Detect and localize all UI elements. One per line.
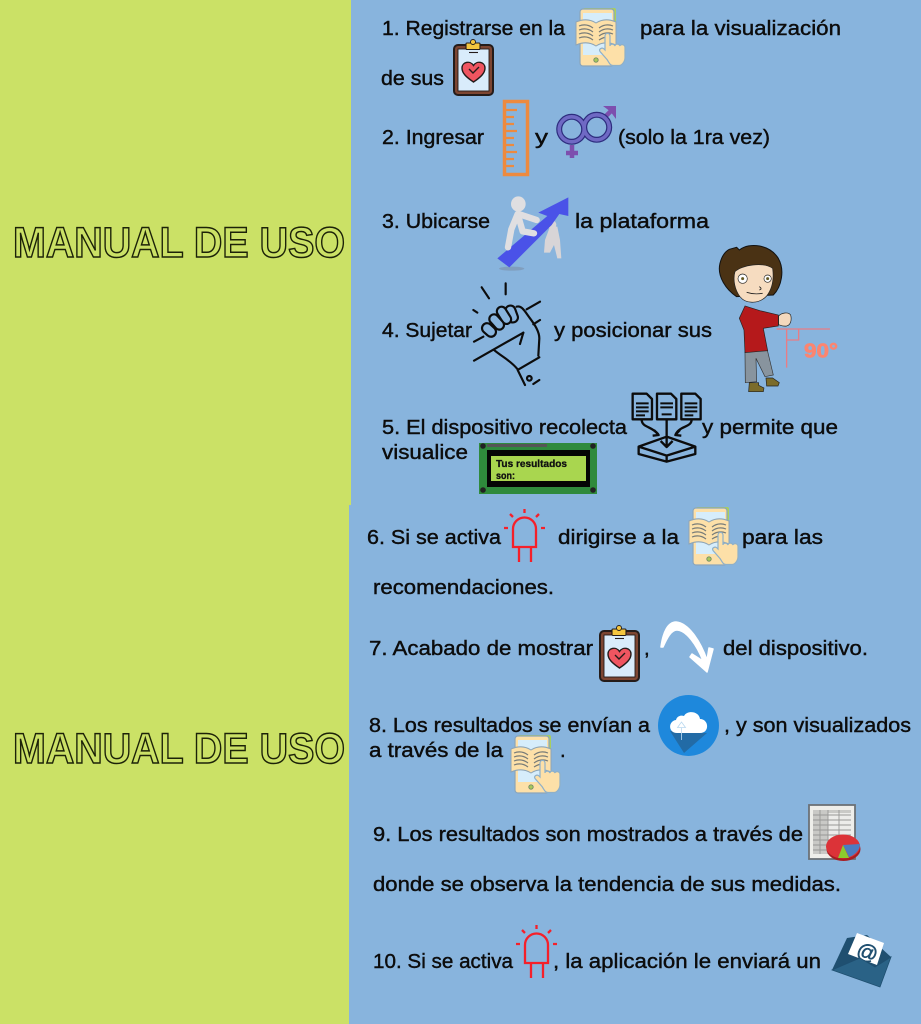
text: lcd message: son: xyxy=(496,470,515,482)
text: step 9 start: 9. Los resultados son mostrados a través de xyxy=(373,823,803,846)
text: step 6 end: recomendaciones. xyxy=(373,576,554,599)
heading: manual de uso bottom: MANUAL DE USO xyxy=(13,726,345,773)
text: step 1 end: de sus xyxy=(381,67,444,90)
step 10 xyxy=(373,925,891,987)
step 9 xyxy=(373,805,860,896)
text: step 6 start: 6. Si se activa xyxy=(367,526,502,549)
text: step 3 end: la plataforma xyxy=(575,210,710,233)
text: at sign: @ xyxy=(854,939,880,967)
icon: app tablet with book xyxy=(511,735,560,793)
text: step 4 start: 4. Sujetar xyxy=(382,319,472,342)
icon: app tablet with book xyxy=(689,507,738,565)
text: step 6 after icon: para las xyxy=(742,526,823,549)
text: step 5 start: 5. El dispositivo recolecta xyxy=(382,416,628,439)
text: step 5 end: visualice xyxy=(382,441,468,464)
text: step 7 start: 7. Acabado de mostrar xyxy=(369,637,593,660)
icon: boy with arms at ninety degrees xyxy=(719,245,838,392)
text: period: . xyxy=(560,739,566,762)
step 2 xyxy=(382,102,770,174)
text: 90 degrees: 90° xyxy=(804,341,838,363)
icon: cloud upload xyxy=(658,695,719,756)
text: step 10 end: , la aplicación le enviará un xyxy=(553,950,821,973)
step 8 xyxy=(369,695,911,793)
icon: app tablet with book xyxy=(576,8,625,66)
text: step 8 second line: a través de la xyxy=(369,739,504,762)
text: step 2 start: 2. Ingresar xyxy=(382,126,484,149)
heading: manual de uso top: MANUAL DE USO xyxy=(13,220,345,267)
icon: red led xyxy=(516,925,557,978)
text: step 4 end: y posicionar sus xyxy=(554,319,712,342)
step 3 xyxy=(382,196,710,271)
text: comma: , xyxy=(644,637,650,660)
icon: clipboard with heart xyxy=(454,40,493,95)
step 7 xyxy=(369,622,868,681)
icon: email envelope xyxy=(832,933,891,987)
text: lcd message: Tus resultados xyxy=(496,458,567,470)
step 5 xyxy=(382,394,838,494)
text: step 8 start: 8. Los resultados se envían a xyxy=(369,714,651,737)
panel: left green column top xyxy=(0,0,351,505)
icon: spreadsheet with pie chart xyxy=(809,805,860,861)
text: y: y xyxy=(535,126,549,149)
icon: curved white arrow xyxy=(661,622,713,672)
icon: lcd display xyxy=(479,443,597,494)
icon: documents into tray xyxy=(633,394,701,462)
text: step 5 middle: y permite que xyxy=(702,416,838,439)
icon: gender symbols xyxy=(559,106,616,158)
step 4 xyxy=(382,245,838,392)
text: step 10 start: 10. Si se activa xyxy=(373,950,514,973)
text: step 7 end: del dispositivo. xyxy=(723,637,868,660)
step 1 xyxy=(381,8,841,95)
icon: clipboard with heart xyxy=(600,626,639,681)
icon: ruler xyxy=(504,102,528,174)
text: step 8 middle: , y son visualizados xyxy=(724,714,911,737)
text: step 9 end: donde se observa la tendencia de sus medidas. xyxy=(373,873,841,896)
icon: red led xyxy=(504,509,545,562)
icon: fist gripping bar xyxy=(473,283,540,385)
text: step 6 middle: dirigirse a la xyxy=(558,526,680,549)
icon: figures climbing arrow xyxy=(497,196,568,271)
text: step 1 middle: para la visualización xyxy=(640,17,841,40)
text: step 3 start: 3. Ubicarse xyxy=(382,210,490,233)
step 6 xyxy=(367,507,823,599)
panel: left green column bottom xyxy=(0,505,349,1024)
text: step 2 end: (solo la 1ra vez) xyxy=(618,126,770,149)
text: step 1 start: 1. Registrarse en la xyxy=(382,17,566,40)
